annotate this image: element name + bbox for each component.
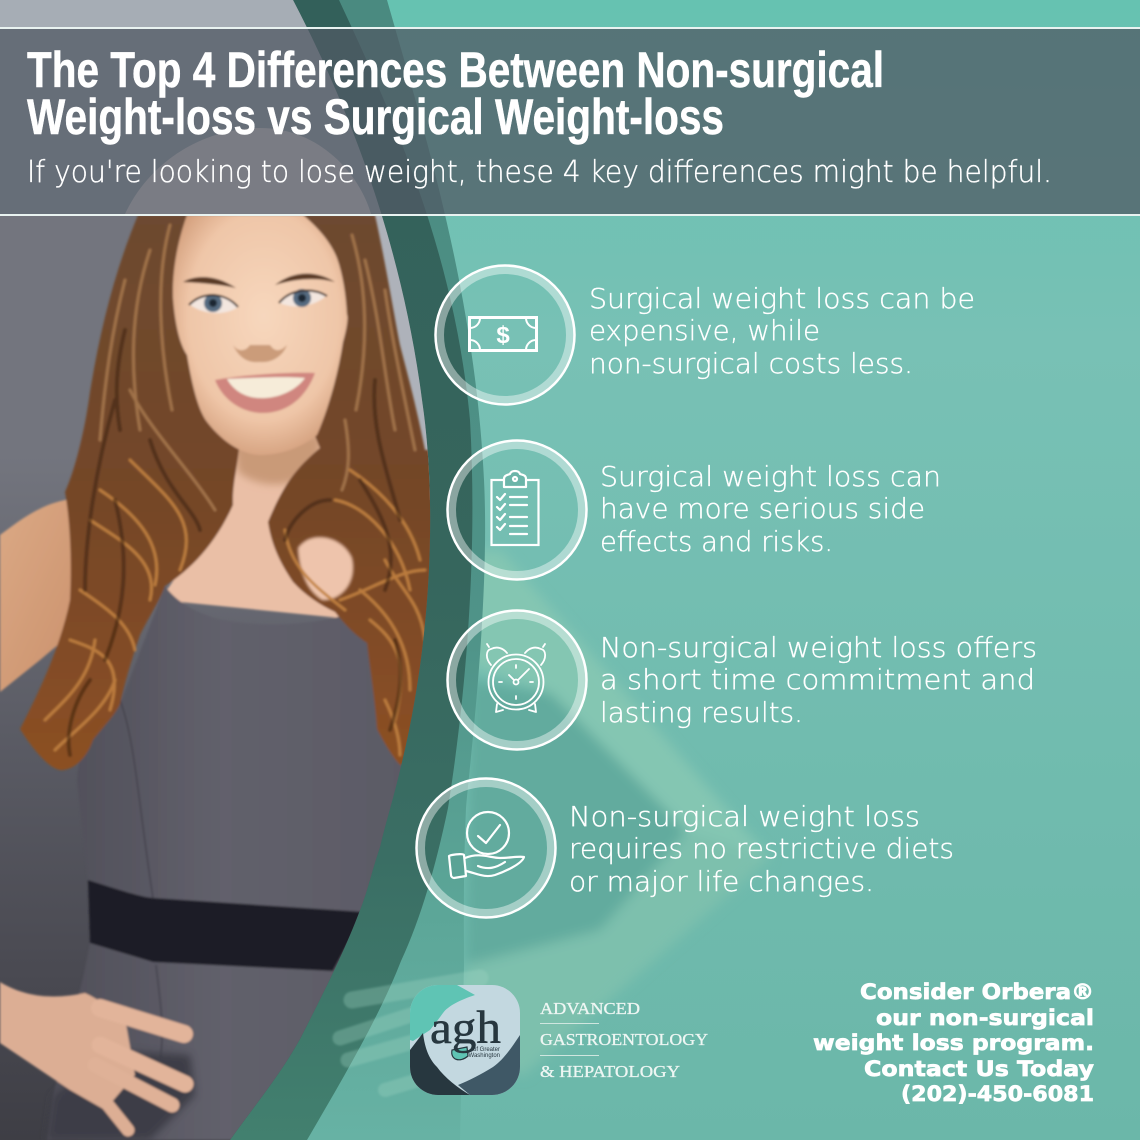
text <box>600 460 941 558</box>
item 2: risks <box>448 440 941 580</box>
text: requires no restrictive diets <box>569 832 954 865</box>
icon ring <box>416 778 556 918</box>
text: Surgical weight loss can be <box>589 282 975 315</box>
title <box>27 42 884 145</box>
hair dark waves <box>69 330 400 755</box>
head seen through band <box>125 128 371 214</box>
item 3: time <box>448 610 1037 750</box>
text: expensive, while <box>589 314 820 347</box>
logo wordmark: GASTROENTOLOGY <box>540 1030 708 1049</box>
dress belt <box>88 880 365 971</box>
curved mid teal band <box>228 0 485 1140</box>
logo mark: Washington <box>469 1053 500 1059</box>
photo: smiling woman <box>0 0 440 1140</box>
blurred fingers of the ghost hand <box>340 978 480 1090</box>
text <box>600 631 1037 729</box>
call to action: our non-surgical <box>876 1006 1094 1030</box>
neck shadow <box>232 435 322 484</box>
icon: dollar bill: $ <box>496 322 510 349</box>
shoulder and arm <box>0 498 72 692</box>
nose <box>233 345 287 362</box>
logo wordmark: ADVANCED <box>540 999 640 1018</box>
text: or major life changes. <box>569 865 874 898</box>
text: a short time commitment and <box>600 663 1035 696</box>
icon ring <box>448 610 586 750</box>
item 1: cost <box>436 266 975 404</box>
text <box>589 282 975 380</box>
skin between curls <box>298 537 353 600</box>
icon ring <box>436 266 574 404</box>
text: Surgical weight loss can <box>600 460 941 493</box>
call to action: weight loss program. <box>813 1031 1094 1055</box>
blurred arm silhouette <box>445 551 770 1076</box>
call to action: Contact Us Today <box>864 1057 1094 1081</box>
icon: hand with check <box>449 812 524 878</box>
text: non-surgical costs less. <box>589 347 913 380</box>
curved dark teal band <box>200 0 472 1140</box>
icon: clipboard checklist <box>492 471 538 545</box>
dress <box>48 588 402 1140</box>
woman figure <box>0 215 440 1140</box>
smile <box>215 373 315 413</box>
text <box>569 800 954 898</box>
text: have more serious side <box>600 492 925 525</box>
lower curl highlights <box>45 460 425 755</box>
dress seam <box>120 700 162 1060</box>
dark hip behind hand <box>47 1050 195 1140</box>
photo wall <box>0 0 440 1140</box>
logo mark <box>410 985 520 1095</box>
text: Non-surgical weight loss offers <box>600 631 1037 664</box>
face <box>173 215 348 455</box>
text: lasting results. <box>600 696 803 729</box>
call to action <box>813 980 1094 1106</box>
logo mark: of Greater <box>473 1047 500 1053</box>
hair left mass <box>20 215 240 770</box>
translucent header panel <box>0 29 1140 214</box>
text: Non-surgical weight loss <box>569 800 920 833</box>
hand on hip <box>0 982 185 1130</box>
logo wordmark: & HEPATOLOGY <box>540 1062 680 1081</box>
header band <box>0 27 1140 216</box>
eyes <box>189 289 327 313</box>
subtitle: If you're looking to lose weight, these 4 key differences might be helpful. <box>27 155 1052 190</box>
icon: dollar bill <box>470 318 536 350</box>
hair right mass <box>268 215 440 765</box>
item 4: no restrictions <box>416 778 954 918</box>
icon ring <box>448 440 586 580</box>
logo mark: agh <box>430 1002 501 1054</box>
eyebrows <box>183 274 335 288</box>
title: The Top 4 Differences Between Non-surgical <box>27 42 884 98</box>
call to action: (202)-450-6081 <box>901 1082 1094 1106</box>
icon: alarm clock <box>487 644 545 712</box>
call to action: Consider Orbera® <box>860 980 1094 1004</box>
neck and chest <box>166 436 340 620</box>
logo wordmark <box>540 999 708 1081</box>
title: Weight-loss vs Surgical Weight-loss <box>27 89 724 145</box>
logo <box>410 985 708 1095</box>
text: effects and risks. <box>600 525 833 558</box>
upper hair highlights <box>100 225 415 510</box>
